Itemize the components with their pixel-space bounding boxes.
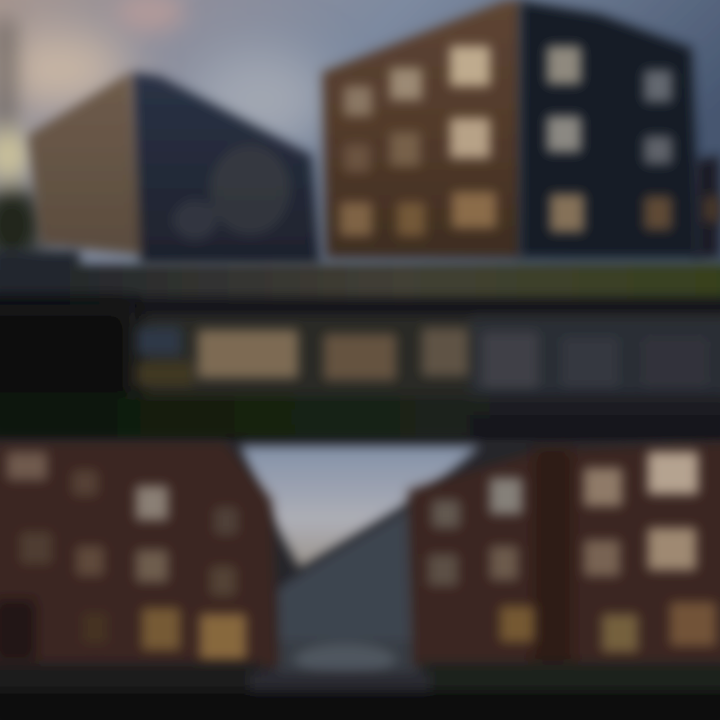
windows: dark block <box>547 46 720 232</box>
windows: middle level <box>137 327 708 388</box>
walkway: middle level with windows <box>0 305 720 410</box>
building: right dark block <box>520 0 720 258</box>
sky opening <box>240 446 480 568</box>
windows: central block <box>340 46 496 236</box>
sky <box>0 0 720 270</box>
building: lower left brick block <box>0 442 278 668</box>
distant buildings and street <box>275 505 425 685</box>
building: left block <box>28 72 320 265</box>
walkway: lower hedge and deck <box>0 396 720 447</box>
building: central brick block <box>322 0 522 258</box>
lower backdrop <box>0 440 720 680</box>
building: lower right brick block <box>408 442 720 668</box>
windows: lower right <box>428 452 716 652</box>
walkway: upper bridge deck <box>0 250 720 322</box>
windows: lower left <box>0 452 246 660</box>
foreground: dark base <box>0 664 720 720</box>
left edge tree and glow <box>0 20 46 265</box>
